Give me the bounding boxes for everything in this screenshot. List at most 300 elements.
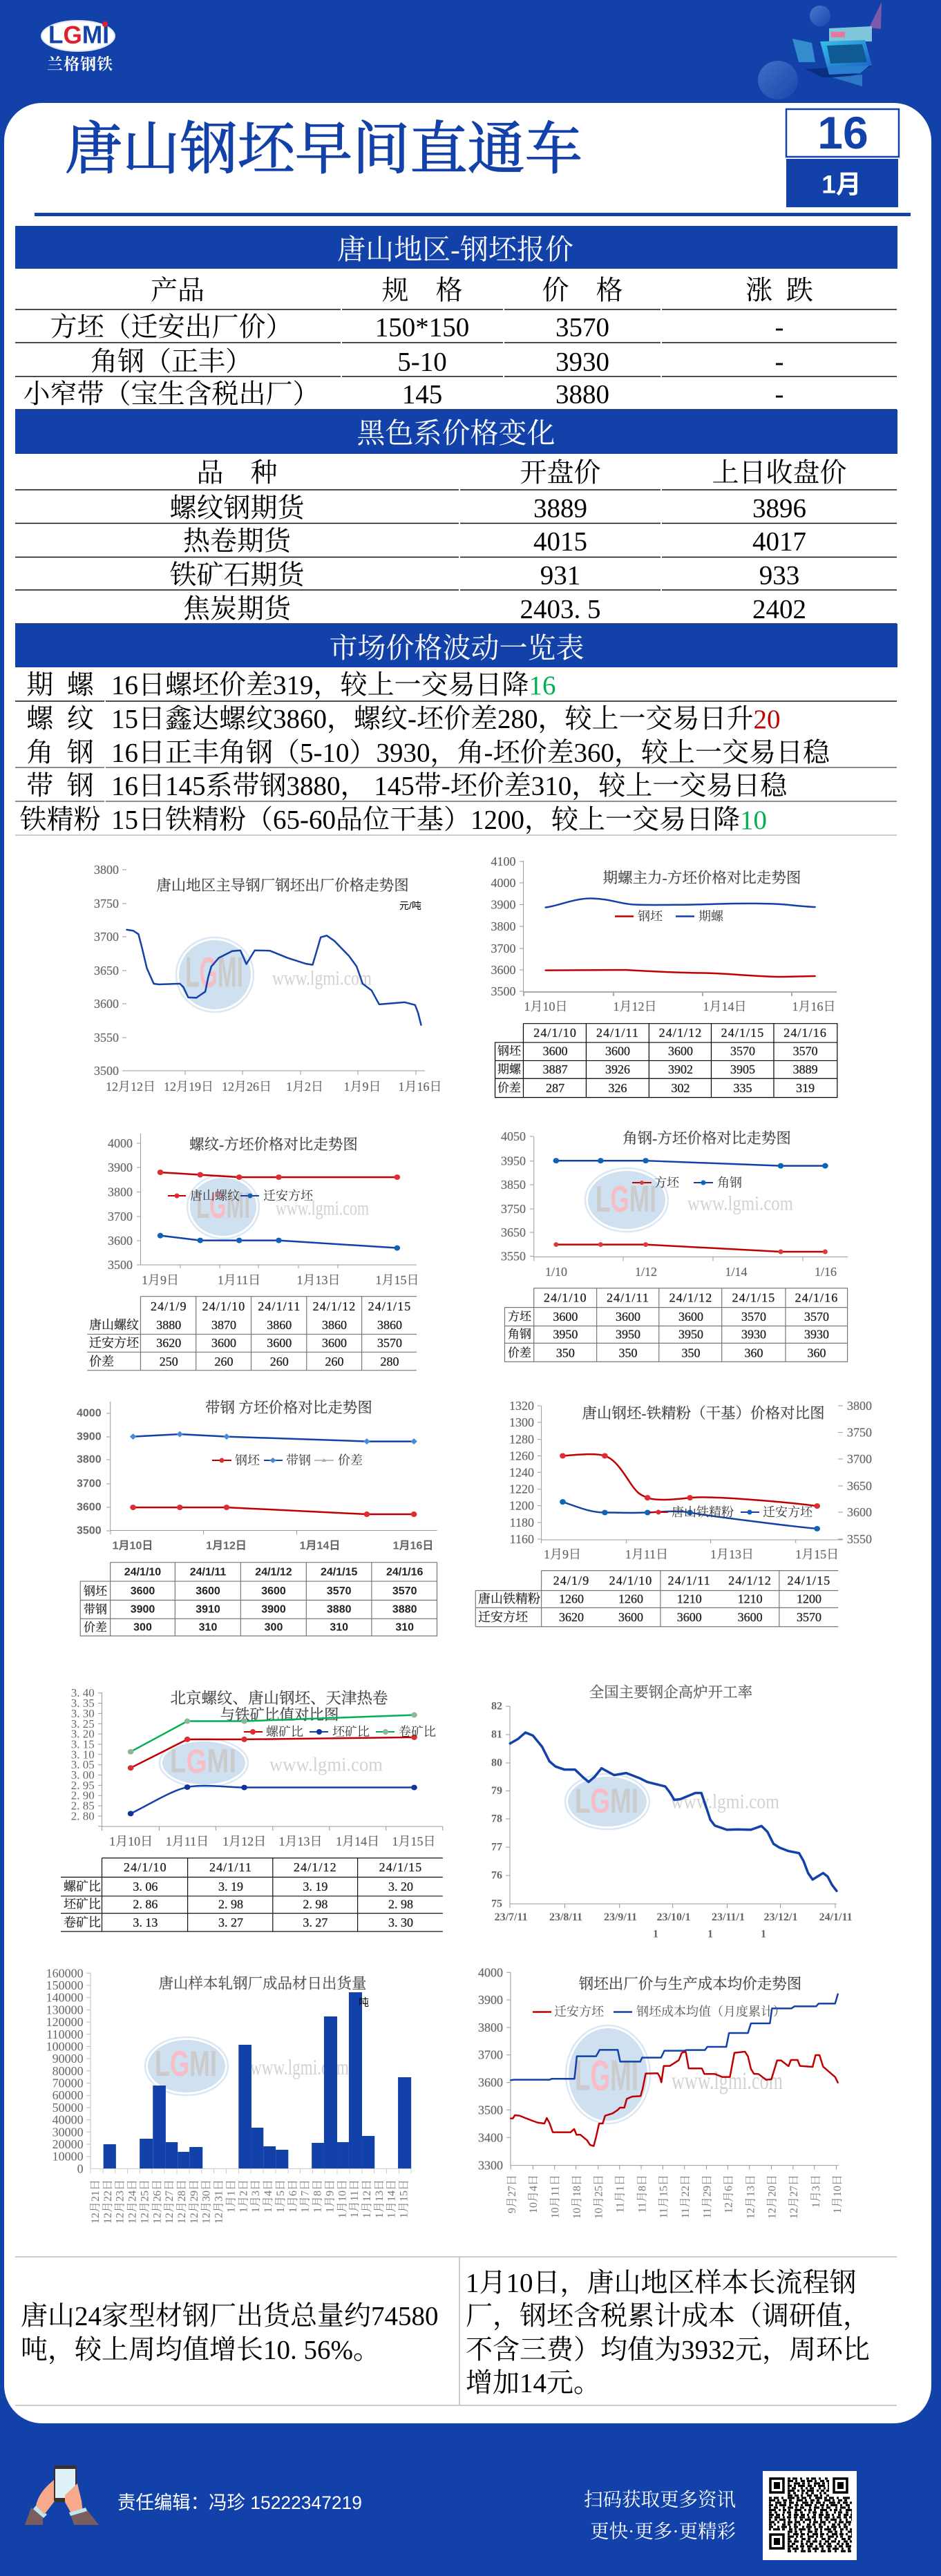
quotes table rows: 角钢（正丰） <box>91 347 252 377</box>
y axis: 30000 <box>53 2125 84 2139</box>
watermark: LGMI <box>170 1744 236 1780</box>
data table: 1210 <box>677 1592 702 1605</box>
data table: 24/1/11 <box>209 1860 252 1874</box>
futures table rows: 3889 <box>533 493 587 524</box>
x axis: 10月4日 <box>527 2175 540 2213</box>
data table: 1260 <box>618 1592 643 1605</box>
x axis: 11月8日 <box>636 2175 648 2213</box>
lines: concentrate and billet with markers <box>560 1453 820 1532</box>
data table: 3600 <box>322 1336 347 1350</box>
x axis: 1月10日 <box>831 2175 844 2213</box>
x axis: 1/14 <box>725 1265 748 1279</box>
data table: 24/1/16 <box>783 1026 827 1040</box>
x axis: 1 <box>653 1929 658 1940</box>
y axis <box>77 1402 111 1536</box>
unit: 吨 <box>359 1996 369 2009</box>
x axis: 12月20日 <box>766 2175 778 2219</box>
x axis: 1月13日 <box>710 1547 754 1561</box>
line: billet price <box>126 930 421 1025</box>
x axis: 1月14日 <box>300 1540 340 1552</box>
x axis: 10月11日 <box>549 2175 561 2218</box>
y axis: 3. 20 <box>71 1728 95 1741</box>
watermark: www.lgmi.com <box>250 2054 349 2079</box>
commentary: cost: 不含三费）均值为3932元，周环比 <box>466 2335 870 2365</box>
y axis: 120000 <box>46 2015 84 2029</box>
section heading: futures: 黑色系价格变化 <box>357 417 555 449</box>
quotes table rows: 规 格 <box>381 276 463 305</box>
watermark: LGMI <box>596 1179 656 1220</box>
header rule <box>35 213 911 216</box>
y axis: 75 <box>491 1898 502 1909</box>
chart title: 角钢-方坯价格对比走势图 <box>622 1130 791 1147</box>
panel: bottom commentary <box>15 2257 897 2405</box>
y axis: 76 <box>491 1869 502 1882</box>
legend: 迁安方坯 <box>263 1189 314 1203</box>
logo: LGMI: 兰格钢铁 <box>47 55 113 73</box>
quotes table rows: 涨 跌 <box>745 276 813 305</box>
legend: 方坯 <box>654 1176 680 1190</box>
quotes table rows: 3570 <box>555 312 609 343</box>
data table: 3. 20 <box>388 1880 413 1893</box>
illustration: laptop and screens <box>758 2 882 99</box>
fluctuation rows: 16日正丰角钢（5-10）3930，角-坯价差360，较上一交易日稳 <box>111 738 830 768</box>
x axis: 1/12 <box>635 1265 657 1279</box>
data table: 3620 <box>559 1610 584 1624</box>
futures table rows: 铁矿石期货 <box>169 561 306 590</box>
panel: market fluctuation list <box>15 624 897 835</box>
data table: 3900 <box>131 1604 155 1615</box>
x axis: 1月10日 <box>524 1000 568 1013</box>
y axis: 3900 <box>108 1161 133 1174</box>
legend <box>615 909 724 923</box>
data table: 3600 <box>668 1044 693 1058</box>
y axis: 2. 80 <box>71 1810 95 1822</box>
data table: 24/1/9 <box>553 1574 589 1587</box>
y axis: 3500 <box>491 984 515 998</box>
quotes table rows: 150*150 <box>375 312 469 343</box>
data table: 24/1/10 <box>609 1574 652 1587</box>
quotes table rows: 价 格 <box>542 276 623 305</box>
quotes table rows: 小窄带（宝生含税出厂） <box>23 380 320 409</box>
legend <box>244 1725 436 1739</box>
y axis: 3600 <box>77 1502 102 1513</box>
chart title: 唐山地区主导钢厂钢坯出厂价格走势图 <box>156 877 409 894</box>
x axis: 12月6日 <box>723 2175 735 2213</box>
data table: 24/1/15 <box>368 1299 411 1313</box>
data table: 3950 <box>616 1327 640 1341</box>
y axis: 3300 <box>478 2159 503 2173</box>
legend: 期螺 <box>698 909 724 923</box>
data table: 24/1/11 <box>596 1026 639 1040</box>
data table: 2. 86 <box>133 1898 158 1911</box>
logo: LGMI <box>41 21 115 73</box>
y axis: 10000 <box>53 2150 84 2164</box>
data table: 24/1/11 <box>190 1567 226 1578</box>
y axis: 4050 <box>501 1129 526 1143</box>
data table: 3910 <box>196 1604 220 1615</box>
data table: 1210 <box>738 1592 763 1605</box>
data table: 期螺 <box>497 1062 522 1076</box>
x axis: 1月6日 <box>287 2179 299 2213</box>
section heading: quotes <box>15 226 897 269</box>
watermark <box>160 1739 383 1787</box>
x axis: 1月9日 <box>544 1547 581 1561</box>
watermark: www.lgmi.com <box>276 1196 369 1220</box>
y axis: 3550 <box>501 1249 526 1263</box>
data table: 3. 30 <box>388 1916 413 1929</box>
lines: three ore ratios with markers <box>128 1712 417 1816</box>
data table: 335 <box>734 1081 752 1095</box>
legend: 迁安方坯 <box>554 2005 605 2019</box>
left y axis: 1320 <box>509 1399 534 1413</box>
legend: 卷矿比 <box>399 1725 436 1739</box>
logo: LGMI: LGMI <box>48 21 109 48</box>
data table: 24/1/15 <box>732 1291 775 1305</box>
right y axis: 3800 <box>847 1399 872 1413</box>
data table: 24/1/15 <box>788 1574 830 1587</box>
data table: 价差 <box>497 1082 521 1094</box>
section heading: fluctuation: 市场价格波动一览表 <box>329 632 584 664</box>
date box: day <box>786 107 899 158</box>
y axis: 3700 <box>77 1478 102 1489</box>
futures table rows: 热卷期货 <box>183 526 293 557</box>
data table: 300 <box>133 1622 152 1633</box>
x axis: 1月7日 <box>299 2179 312 2213</box>
chart title <box>170 1690 388 1724</box>
data table: 360 <box>807 1346 826 1359</box>
x axis: 1 <box>707 1929 713 1940</box>
x axis: 1月3日 <box>249 2179 262 2213</box>
y axis: 3. 30 <box>71 1707 95 1720</box>
data table: 3900 <box>261 1604 286 1615</box>
data table: 3600 <box>261 1585 286 1597</box>
watermark: LGMI <box>196 1185 250 1226</box>
watermark <box>176 937 372 1012</box>
data table: 24/1/15 <box>721 1026 764 1040</box>
fluctuation rows: 螺 纹 <box>26 705 94 734</box>
x axis: 1月16日 <box>398 1080 442 1094</box>
x axis: 12月24日 <box>126 2179 138 2224</box>
data table <box>504 1288 848 1362</box>
y axis: 77 <box>491 1842 502 1853</box>
x axis <box>495 1904 853 1940</box>
x axis: 1月13日 <box>279 1835 322 1849</box>
futures table rows: 931 <box>540 561 580 590</box>
data table: 方坯 <box>508 1310 532 1324</box>
x axis: 1月10日 <box>109 1835 153 1849</box>
data table: 3570 <box>741 1310 766 1324</box>
chart: rebar vs billet <box>87 1134 419 1371</box>
watermark: www.lgmi.com <box>687 1192 793 1214</box>
x axis: 1月4日 <box>262 2179 274 2213</box>
x axis: 1月16日 <box>393 1540 433 1552</box>
data table: 3570 <box>730 1044 755 1058</box>
x axis: 1月13日 <box>297 1273 340 1287</box>
data table <box>61 1858 443 1931</box>
lines: billet price and cost <box>511 1994 838 2146</box>
left y axis: 1220 <box>509 1482 534 1496</box>
data table: 3887 <box>543 1062 568 1076</box>
data table: 24/1/11 <box>668 1574 711 1587</box>
data table: 360 <box>745 1346 763 1359</box>
section heading: quotes: 唐山地区-钢坯报价 <box>337 233 573 265</box>
data table: 24/1/15 <box>379 1860 422 1874</box>
x axis: 12月22日 <box>102 2179 114 2224</box>
x axis: 1月15日 <box>392 1835 435 1849</box>
data table: 24/1/15 <box>321 1567 357 1578</box>
watermark: www.lgmi.com <box>672 2067 783 2095</box>
legend: 唐山铁精粉 <box>672 1505 734 1519</box>
chart title: 唐山钢坯-铁精粉（干基）价格对比图 <box>582 1405 825 1422</box>
bars <box>104 1992 411 2168</box>
data table: 坯矿比 <box>64 1898 101 1911</box>
data table: 3600 <box>738 1610 763 1624</box>
watermark: LGMI <box>575 1782 638 1820</box>
chart title: 与铁矿比值对比图 <box>220 1707 339 1724</box>
x axis: 11月29日 <box>701 2175 713 2218</box>
x axis <box>140 1265 419 1287</box>
data table: 3600 <box>131 1585 155 1597</box>
x axis: 1月15日 <box>376 1273 419 1287</box>
lines: angle steel and billet with markers <box>553 1158 828 1254</box>
y axis: 3700 <box>491 942 515 955</box>
chart: ore ratio comparison <box>61 1686 443 1931</box>
y axis: 3650 <box>501 1225 526 1239</box>
x axis: 1月15日 <box>398 2179 410 2218</box>
data table: 24/1/16 <box>795 1291 838 1305</box>
left y axis: 1240 <box>509 1465 534 1479</box>
x axis: 10月18日 <box>571 2175 583 2219</box>
y axis: 70000 <box>53 2077 84 2090</box>
commentary: cost: 厂，钢坯含税累计成本（调研值， <box>466 2302 870 2331</box>
y axis: 79 <box>491 1785 502 1797</box>
x axis: 1月14日 <box>703 1000 746 1013</box>
data table: 260 <box>214 1355 234 1368</box>
x axis: 11月22日 <box>679 2175 692 2218</box>
x axis: 1月1日 <box>225 2179 238 2213</box>
commentary: shipments: 唐山24家型材钢厂出货总量约74580 <box>21 2302 439 2331</box>
x axis: 1月11日 <box>218 1273 260 1287</box>
data table: 350 <box>556 1346 575 1359</box>
data table: 3570 <box>804 1310 829 1324</box>
y axis: 3800 <box>491 919 515 933</box>
data table: 24/1/12 <box>294 1860 337 1874</box>
data table: 角钢 <box>508 1328 531 1341</box>
watermark <box>145 2037 349 2095</box>
y axis: 3600 <box>108 1234 133 1248</box>
legend: 螺矿比 <box>266 1725 303 1739</box>
x axis: 9月27日 <box>506 2175 518 2213</box>
legend <box>649 1505 813 1519</box>
x axis: 1月11日 <box>625 1547 668 1561</box>
data table: 310 <box>395 1622 414 1633</box>
y axis: 3500 <box>94 1064 119 1078</box>
x axis: 11月1日 <box>614 2175 626 2213</box>
data table: 24/1/10 <box>202 1299 245 1313</box>
y axis: 3400 <box>478 2130 503 2144</box>
data table: 302 <box>672 1081 690 1095</box>
y axis: 3500 <box>77 1525 102 1536</box>
fluctuation rows: 铁精粉 <box>19 805 101 834</box>
legend <box>168 1189 314 1203</box>
data table: 钢坯 <box>84 1585 108 1598</box>
right y axis: 3650 <box>847 1479 872 1493</box>
quotes table rows: 145 <box>402 380 442 409</box>
y axis: 3650 <box>94 964 119 977</box>
x axis: 1月10日 <box>113 1540 153 1552</box>
x axis: 12月13日 <box>744 2175 757 2219</box>
x axis: 1月16日 <box>792 1000 836 1013</box>
data table: 24/1/12 <box>659 1026 702 1040</box>
x axis: 12月12日 <box>106 1080 155 1094</box>
left y axis: 1200 <box>509 1499 534 1513</box>
x axis: 12月28日 <box>175 2179 188 2224</box>
data table: 价差 <box>84 1621 107 1634</box>
x axis: 1月9日 <box>323 2179 336 2213</box>
data table: 24/1/12 <box>728 1574 772 1587</box>
data table: 24/1/10 <box>544 1291 587 1305</box>
futures table rows: 4017 <box>752 526 806 557</box>
data table: 3860 <box>377 1318 402 1332</box>
data table: 3. 27 <box>218 1916 243 1929</box>
x axis: 12月31日 <box>213 2179 225 2224</box>
commentary: cost: 1月10日，唐山地区样本长流程钢 <box>466 2269 857 2298</box>
x axis: 23/11/1 <box>712 1911 745 1923</box>
x axis <box>506 2166 844 2219</box>
y axis <box>491 1701 510 1909</box>
data table: 3600 <box>211 1336 236 1350</box>
quotes table rows: 3930 <box>555 347 609 377</box>
y axis: 81 <box>491 1728 502 1741</box>
y axis: 3900 <box>478 1993 503 2007</box>
fluctuation rows: 带 钢 <box>26 771 94 801</box>
futures table rows: 焦炭期货 <box>183 594 293 624</box>
data table: 3600 <box>267 1336 292 1350</box>
y axis <box>94 863 126 1078</box>
watermark: LGMI <box>155 2044 217 2084</box>
data table: 3889 <box>793 1062 818 1076</box>
data table: 迁安方坯 <box>89 1336 140 1350</box>
x axis: 1月11日 <box>166 1835 209 1849</box>
data table: 3902 <box>668 1062 693 1076</box>
data table: 250 <box>160 1355 178 1368</box>
data table: 3950 <box>553 1327 578 1341</box>
legend: 唐山螺纹 <box>190 1189 240 1203</box>
data table: 24/1/12 <box>255 1567 292 1578</box>
y axis: 3700 <box>478 2048 503 2062</box>
lines: billet and futures <box>546 899 815 977</box>
futures table rows: 933 <box>759 561 799 590</box>
y axis: 130000 <box>46 2003 84 2016</box>
legend: 坯矿比 <box>332 1725 370 1739</box>
x axis: 12月27日 <box>163 2179 175 2224</box>
commentary: shipments <box>21 2302 439 2365</box>
data table: 3930 <box>804 1327 829 1341</box>
unit: 元/吨 <box>399 900 421 911</box>
chart title: 全国主要钢企高炉开工率 <box>589 1684 752 1701</box>
chart: billet price vs production cost <box>478 1965 844 2219</box>
y axis: 3600 <box>478 2076 503 2090</box>
y axis: 4100 <box>491 855 515 868</box>
y axis: 3500 <box>478 2103 503 2117</box>
data table: 3600 <box>605 1044 630 1058</box>
date box: day: 16 <box>817 107 868 158</box>
y axis: 3950 <box>501 1154 526 1168</box>
x axis: 1月11日 <box>348 2179 361 2217</box>
data table: 带钢 <box>84 1603 107 1616</box>
data table: 24/1/12 <box>669 1291 712 1305</box>
x axis: 1月8日 <box>311 2179 323 2213</box>
data table: 3880 <box>327 1604 352 1615</box>
right y axis: 3750 <box>847 1426 872 1440</box>
x axis <box>111 1531 437 1552</box>
x axis: 1月9日 <box>142 1273 179 1287</box>
y axis: 3. 40 <box>71 1686 95 1699</box>
x axis: 1月12日 <box>614 1000 656 1013</box>
data table: 3. 13 <box>133 1916 158 1929</box>
y axis: 20000 <box>53 2137 84 2151</box>
x axis: 1月15日 <box>795 1547 839 1561</box>
data table: 卷矿比 <box>64 1916 101 1929</box>
quotes table rows: 产品 <box>151 276 205 305</box>
data table <box>475 1571 838 1627</box>
left y axis: 1180 <box>510 1516 534 1529</box>
data table: 24/1/12 <box>313 1299 356 1313</box>
x axis <box>534 1257 848 1279</box>
y axis: 3500 <box>108 1258 133 1272</box>
chart title: 带钢 方坯价格对比走势图 <box>205 1400 372 1416</box>
editor credit: 责任编辑：冯珍 15222347219 <box>117 2492 362 2513</box>
y axis: 3800 <box>77 1453 102 1466</box>
y axis: 3800 <box>478 2021 503 2034</box>
watermark <box>566 2025 783 2124</box>
y axis: 2. 90 <box>71 1789 95 1802</box>
x axis: 1月9日 <box>344 1080 381 1094</box>
left y axis: 1300 <box>509 1415 534 1429</box>
chart: national blast furnace operating rate <box>491 1684 853 1940</box>
y axis: 3. 15 <box>71 1738 95 1750</box>
y axis: 50000 <box>53 2101 84 2115</box>
y axis: 0 <box>77 2162 84 2175</box>
data table: 螺矿比 <box>64 1880 101 1893</box>
x axis: 1月5日 <box>274 2179 287 2213</box>
right y axis: 3700 <box>847 1452 872 1466</box>
data table: 2. 98 <box>303 1898 327 1911</box>
x axis: 1月13日 <box>373 2179 386 2218</box>
x axis: 1月3日 <box>810 2175 822 2208</box>
x axis: 1月14日 <box>336 1835 379 1849</box>
data table: 3930 <box>741 1327 766 1341</box>
y axis: 3850 <box>501 1178 526 1192</box>
futures table rows: 2402 <box>752 594 806 624</box>
fluctuation rows: 角 钢 <box>26 738 94 768</box>
y axis <box>478 1965 511 2173</box>
data table: 260 <box>270 1355 289 1368</box>
y axis: 40000 <box>53 2113 84 2127</box>
y axis: 4000 <box>491 876 515 890</box>
watermark <box>187 1175 369 1239</box>
legend: 迁安方坯 <box>763 1505 813 1519</box>
lines: rebar and billet with markers <box>158 1170 400 1251</box>
data table <box>87 1297 417 1371</box>
x axis: 1月2日 <box>237 2179 249 2213</box>
data table: 310 <box>330 1622 348 1633</box>
x axis: 12月30日 <box>200 2179 213 2224</box>
quotes table rows <box>15 276 897 410</box>
data table: 价差 <box>508 1346 531 1359</box>
y axis: 3900 <box>491 898 515 912</box>
x axis: 1月12日 <box>222 1835 266 1849</box>
